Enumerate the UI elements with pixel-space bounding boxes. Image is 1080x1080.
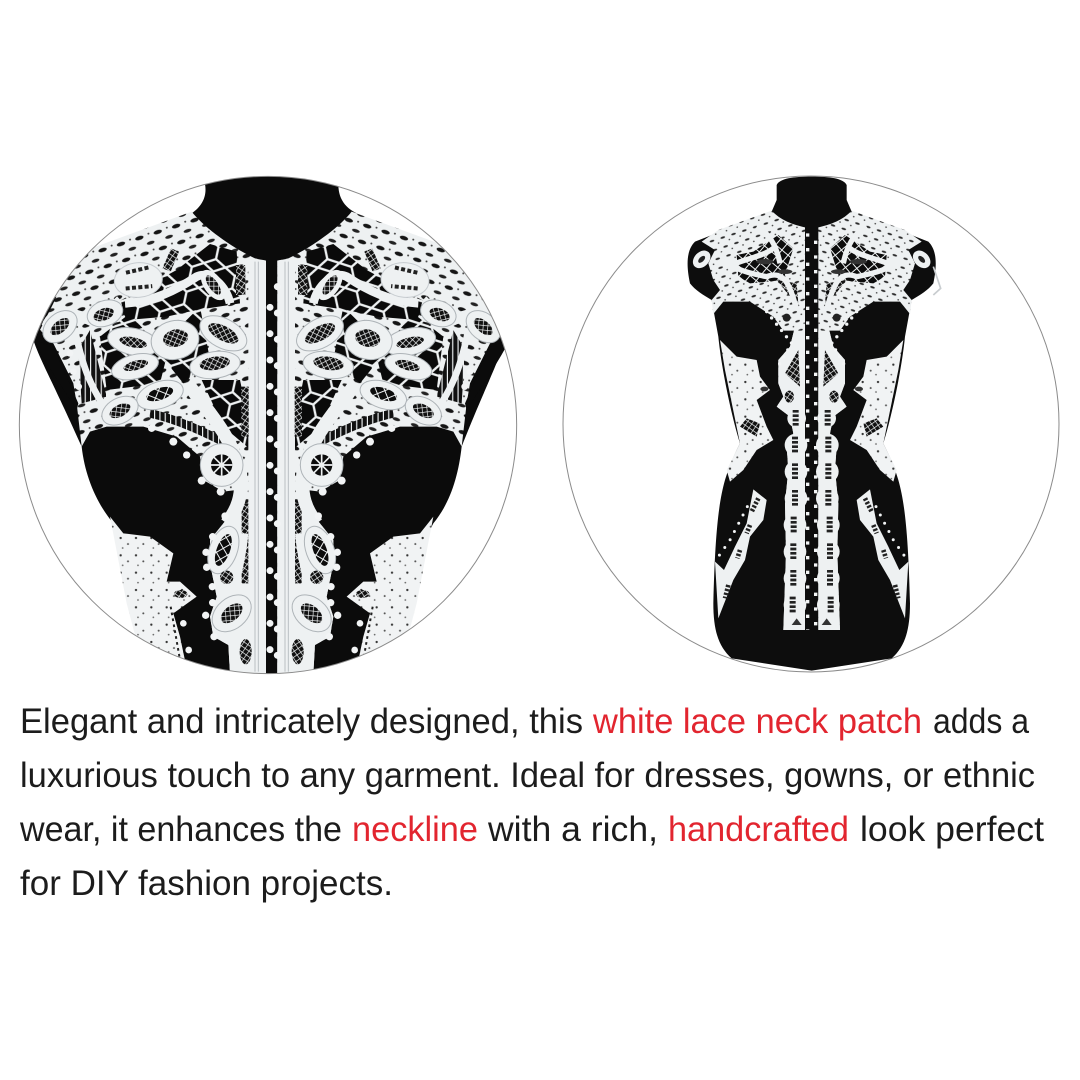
mirrored right half of lace xyxy=(277,212,509,673)
description paragraph: wear, it enhances the xyxy=(19,810,342,849)
description paragraph: adds a xyxy=(933,702,1029,741)
curling lace bands xyxy=(47,300,117,327)
waist side lace xyxy=(720,340,773,482)
yoke bands xyxy=(720,227,797,310)
lace yoke and front panel xyxy=(40,212,266,673)
hip lace strip xyxy=(715,489,767,618)
shoulder loop xyxy=(689,247,714,272)
lower front net xyxy=(785,350,800,387)
description paragraph: with a rich, xyxy=(487,810,658,849)
placket stitching xyxy=(255,262,258,672)
bust bobbles xyxy=(767,312,792,370)
edge bobbles xyxy=(67,350,229,640)
rosette xyxy=(200,444,243,486)
lace loops xyxy=(37,250,263,671)
description paragraph: neckline xyxy=(352,810,478,849)
mannequin torso close-up xyxy=(33,176,504,673)
description paragraph: handcrafted xyxy=(668,810,849,849)
sleeve black cut-in xyxy=(34,340,78,410)
circle outline xyxy=(563,176,1059,672)
yoke and centre panel xyxy=(702,211,805,630)
circle outline xyxy=(19,176,517,674)
left half lace figure xyxy=(689,211,807,630)
solid placket xyxy=(248,257,266,673)
rosette xyxy=(783,314,791,322)
centre button column xyxy=(270,287,277,670)
yoke openings xyxy=(737,235,793,283)
photo circle: full bodice on mannequin xyxy=(563,176,1059,672)
centre buttons xyxy=(806,233,810,630)
honeycomb net xyxy=(118,244,240,320)
description paragraph: white lace neck patch xyxy=(592,702,922,741)
scalloped centre edging xyxy=(784,409,807,616)
left half of lace xyxy=(34,212,266,673)
description paragraph: for DIY fashion projects. xyxy=(20,864,393,903)
mirrored right half lace xyxy=(816,211,934,630)
solid lower centre panel xyxy=(777,331,805,630)
mannequin full silhouette xyxy=(688,177,936,671)
hanging tag at right shoulder xyxy=(933,267,941,295)
description paragraph xyxy=(19,702,1044,903)
solid lower front panel xyxy=(210,503,266,673)
description paragraph: look perfect xyxy=(860,810,1044,849)
photo circle: close-up of lace on bodice xyxy=(19,176,517,674)
description paragraph: luxurious touch to any garment. Ideal for dresses, gowns, or ethnic xyxy=(20,756,1035,795)
description paragraph: Elegant and intricately designed, this xyxy=(20,702,583,741)
vertical band hatch xyxy=(150,413,227,443)
side waist lace panel xyxy=(110,517,197,668)
